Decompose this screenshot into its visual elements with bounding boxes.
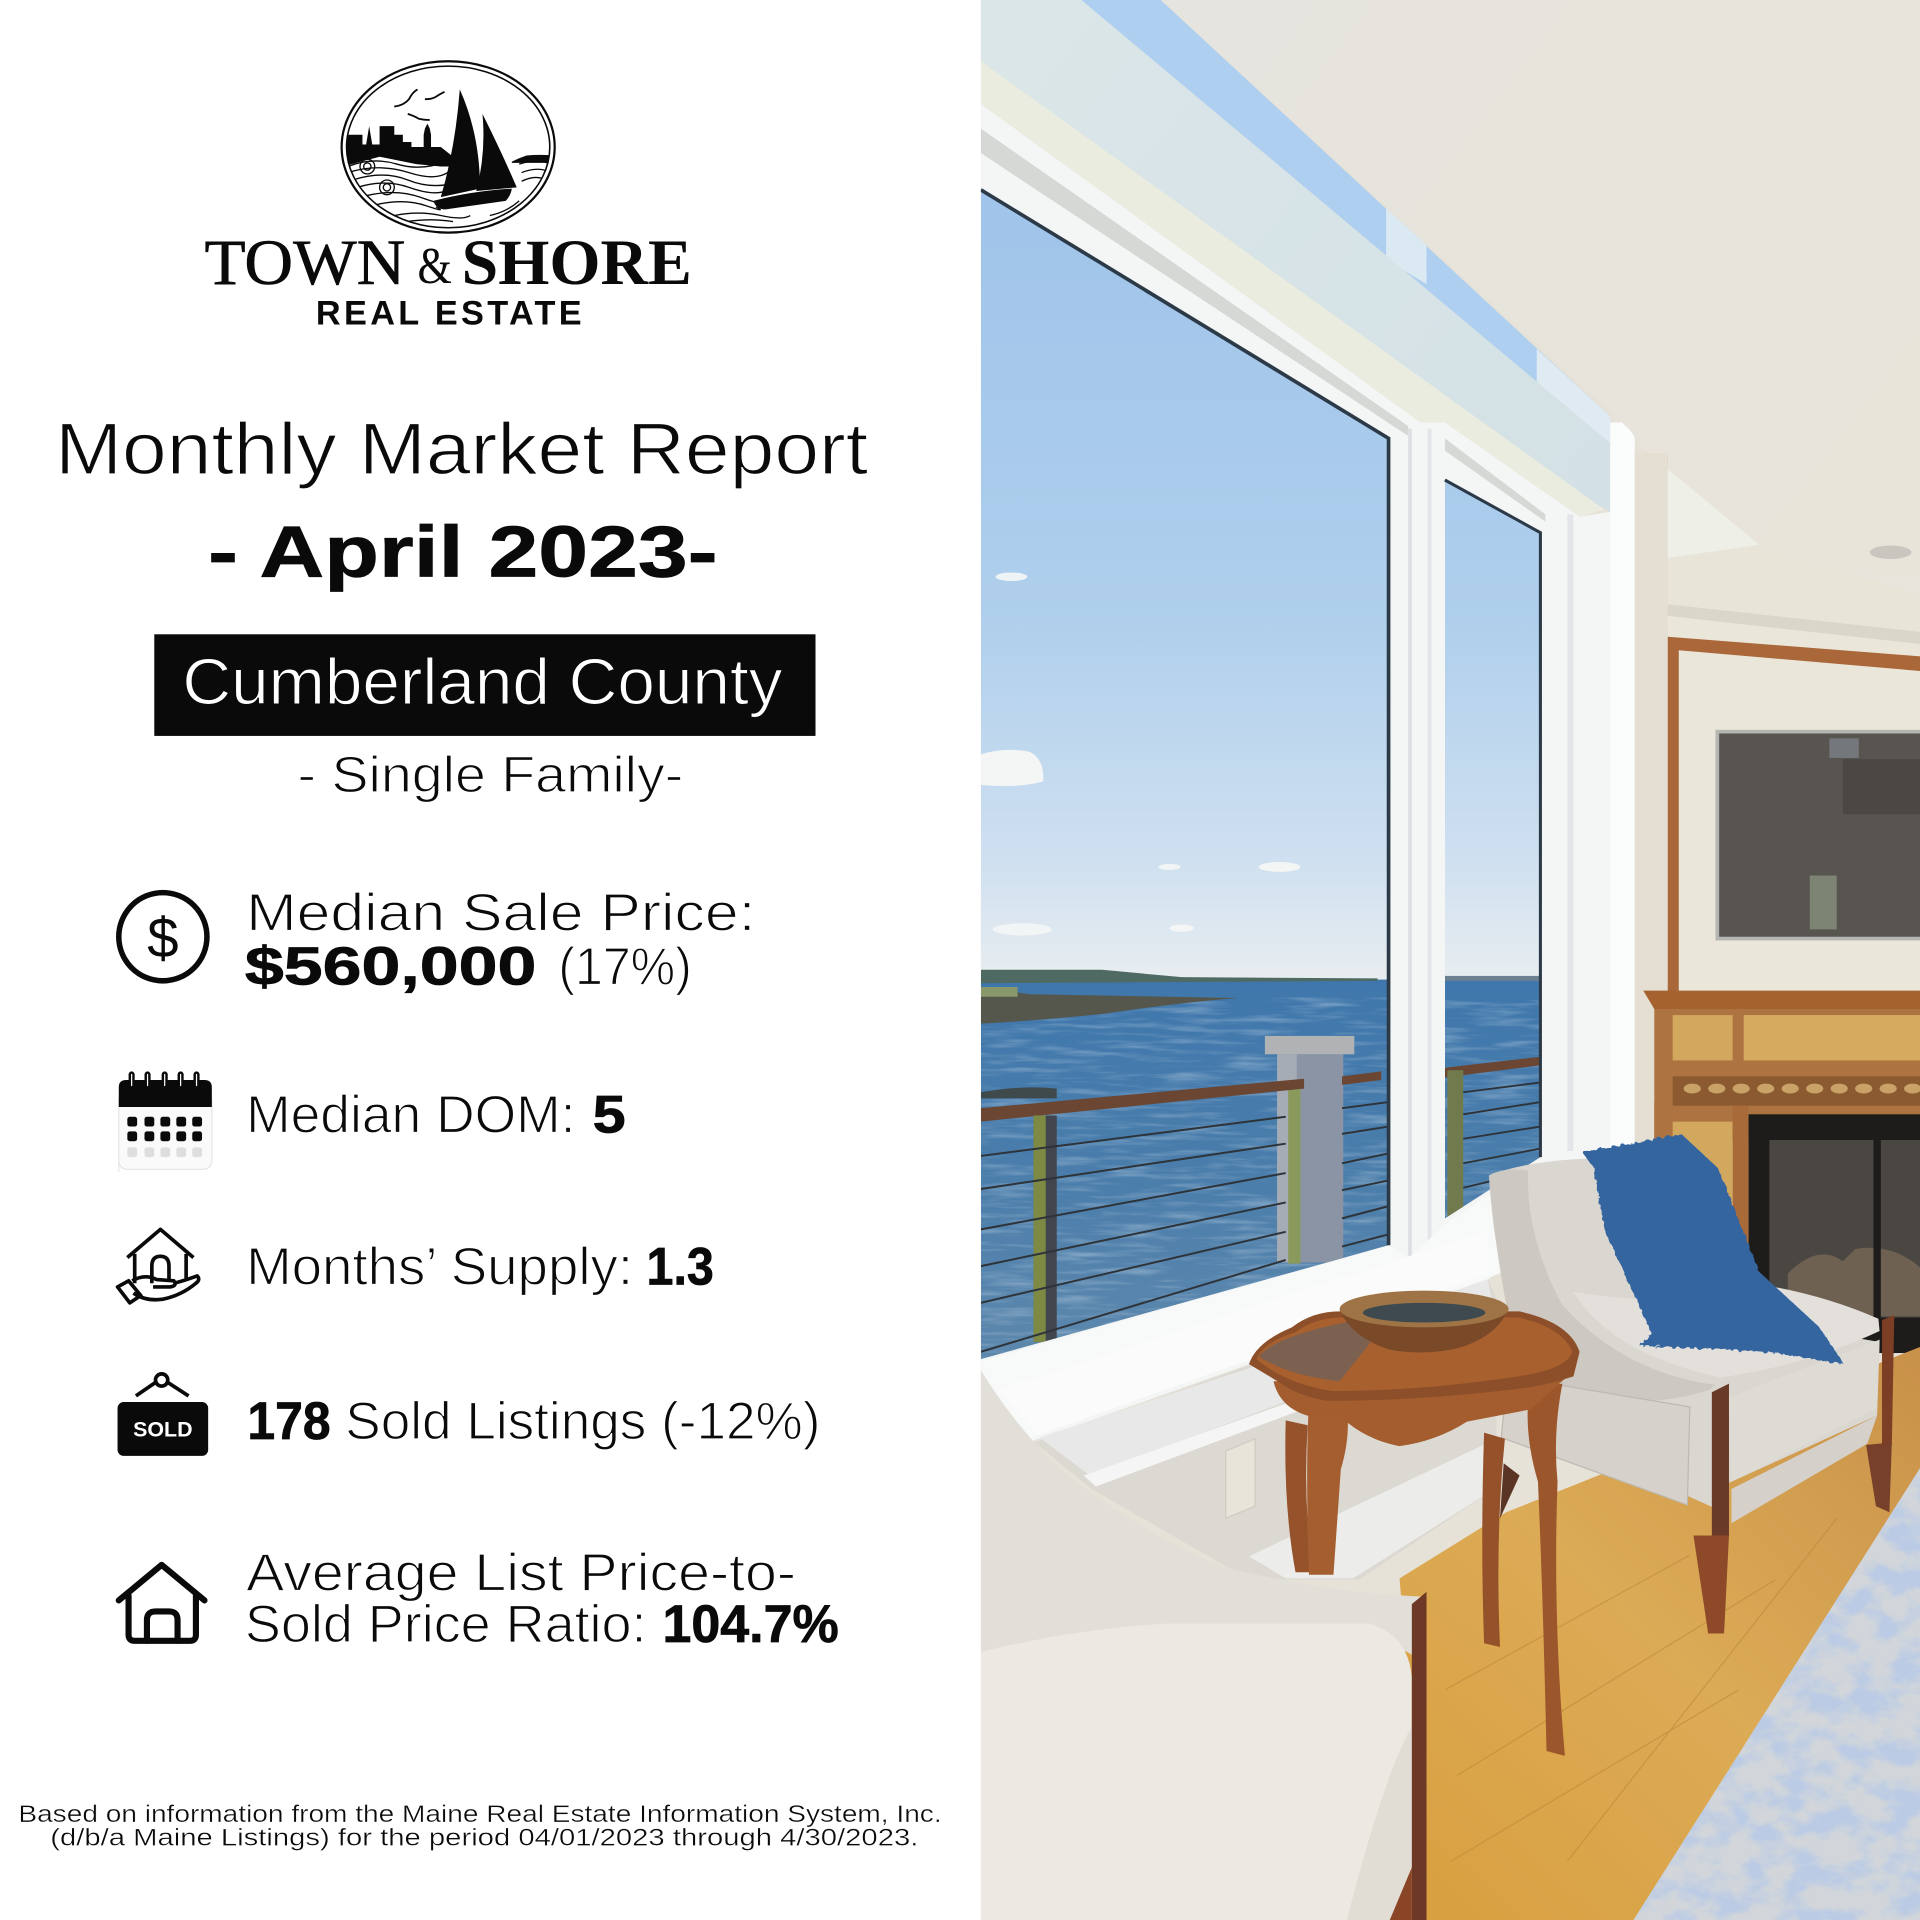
front armchair xyxy=(981,1370,1427,1920)
window wall xyxy=(981,0,1635,1442)
right pane view xyxy=(1445,478,1543,1224)
logo wordmark xyxy=(204,227,692,332)
stat: months' supply: Months’ Supply: xyxy=(246,1237,633,1296)
stat: median sale price: $560,000 xyxy=(245,936,536,996)
stat: median sale price: (17%) xyxy=(558,937,692,996)
beam xyxy=(981,0,1610,512)
side table xyxy=(1249,1311,1580,1756)
birds xyxy=(394,89,444,120)
title: Monthly Market Report: Monthly Market Report xyxy=(55,407,868,490)
wood trim xyxy=(1668,637,1920,992)
county banner: Cumberland County xyxy=(182,645,783,718)
stat: list-to-sold ratio: Average List Price-to- xyxy=(246,1544,796,1603)
stat: median sale price xyxy=(119,884,756,996)
icon: sold sign xyxy=(118,1374,208,1456)
stat: median DOM xyxy=(119,1073,626,1172)
wainscot wall xyxy=(1035,1280,1496,1580)
logo wordmark: REAL ESTATE xyxy=(316,294,582,332)
cream sill under beam xyxy=(981,61,1604,517)
icon: dollar coin: $ xyxy=(147,907,179,970)
footnote xyxy=(18,1801,942,1851)
white frame surround xyxy=(981,104,1635,1442)
blue throw blanket xyxy=(1582,1134,1844,1364)
stat: list-to-sold ratio: 104.7% xyxy=(662,1595,839,1654)
back armchair xyxy=(1489,1158,1894,1633)
table top xyxy=(1249,1311,1580,1401)
stat: median DOM: Median DOM: xyxy=(246,1086,576,1145)
icon: calendar xyxy=(119,1073,212,1172)
footnote: Based on information from the Maine Real Estate Information System, Inc. xyxy=(18,1801,942,1828)
logo wordmark: TOWN xyxy=(204,227,405,299)
stat: sold listings: 178 xyxy=(247,1392,331,1451)
icon: house outline xyxy=(119,1565,204,1641)
left pane view xyxy=(981,184,1397,1371)
subtitle: April 2023: - April 2023- xyxy=(208,513,718,593)
stat: median DOM: 5 xyxy=(593,1086,626,1145)
stat: months' supply: 1.3 xyxy=(647,1237,714,1296)
county banner xyxy=(154,634,816,736)
ceiling xyxy=(1161,0,1635,437)
stat: median sale price: Median Sale Price: xyxy=(246,884,756,943)
stat: months' supply xyxy=(118,1229,714,1303)
table apron xyxy=(1273,1379,1565,1446)
logo wordmark: & xyxy=(418,238,452,295)
rug xyxy=(1629,1463,1920,1920)
sill xyxy=(1337,1237,1500,1276)
photo: coastal living room xyxy=(981,0,1920,1920)
stat: sold listings: Sold Listings (-12%) xyxy=(345,1392,820,1451)
railing xyxy=(981,1079,1304,1122)
icon: house in hand xyxy=(118,1229,199,1303)
stat: sold listings xyxy=(118,1374,820,1456)
table legs xyxy=(1285,1420,1309,1572)
logo: Town & Shore Real Estate xyxy=(204,61,692,332)
sailboat xyxy=(441,89,480,197)
stat: list-to-sold ratio xyxy=(119,1544,839,1654)
wall side xyxy=(1635,453,1668,1188)
footnote: (d/b/a Maine Listings) for the period 04/01/2023 through 4/30/2023. xyxy=(50,1824,918,1851)
transom glass xyxy=(1081,0,1610,443)
glass edge lines xyxy=(981,190,1389,1245)
outlet xyxy=(1226,1439,1255,1518)
stat: list-to-sold ratio: Sold Price Ratio: xyxy=(245,1595,647,1654)
logo emblem: oval with sailboat xyxy=(318,61,556,233)
chair legs xyxy=(1712,1384,1729,1536)
wall television xyxy=(1716,730,1920,940)
hardwood floor xyxy=(1400,1347,1920,1920)
icon: dollar coin xyxy=(119,893,207,981)
icon: sold sign: SOLD xyxy=(133,1417,193,1441)
recessed light xyxy=(1870,546,1911,559)
property type label: - Single Family- xyxy=(298,745,683,803)
logo wordmark: SHORE xyxy=(462,227,692,299)
soffit xyxy=(1651,545,1920,632)
deck post xyxy=(1277,1054,1343,1262)
bowl xyxy=(1340,1291,1509,1353)
fireplace xyxy=(1643,991,1920,1353)
